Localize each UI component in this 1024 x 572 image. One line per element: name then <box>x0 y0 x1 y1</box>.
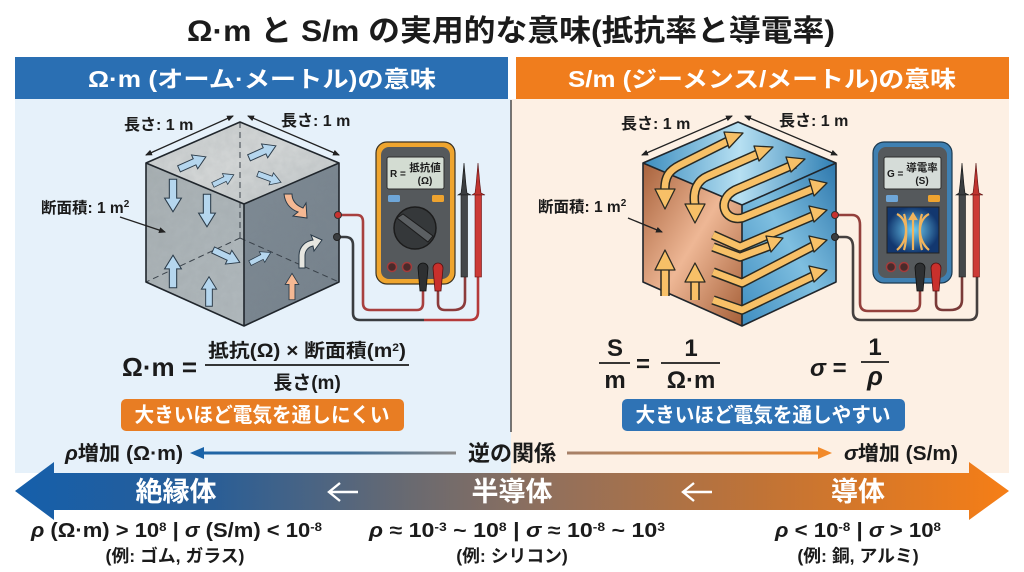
insulator values: -8 <box>310 520 322 534</box>
semiconductor values: -3 <box>434 520 447 534</box>
semiconductor values: 3 <box>657 520 665 534</box>
semiconductor values: | <box>507 520 526 542</box>
cross-section label: 断面積: 1 m <box>41 200 124 217</box>
semiconductor values: ~ 10 <box>605 520 657 542</box>
header: ohm metre: Ω·m (オーム·メートル)の意味 <box>88 66 436 92</box>
formula: siemens per metre: S <box>607 335 623 362</box>
dimension: length labels <box>124 112 350 155</box>
insulator values: σ (S/m) < 10 <box>185 520 300 542</box>
multimeter: resistance <box>376 142 455 291</box>
insulator values: (例: ゴム, ガラス) <box>106 545 245 566</box>
inverse relationship row <box>64 441 958 466</box>
conductor values: σ > 10 <box>869 520 929 542</box>
arrow: left two <box>683 483 712 501</box>
cross-section label <box>41 199 165 232</box>
semiconductor values: ρ ≈ 10 <box>369 520 427 542</box>
cross-section label right: 2 <box>621 198 627 209</box>
semiconductor values: -8 <box>593 520 605 534</box>
meter display: current flow <box>887 207 939 253</box>
multimeter: conductance: 導電率 <box>906 161 938 174</box>
label: conductor: 導体 <box>831 477 885 507</box>
spectrum bar <box>15 462 1009 520</box>
semiconductor values: 8 <box>499 520 507 534</box>
conductor values: 8 <box>934 520 941 534</box>
conductor values: | <box>850 520 869 542</box>
cube: resistive material <box>146 122 339 326</box>
label: sigma increase: σ増加 (S/m) <box>844 442 958 465</box>
dimension: length labels right: 長さ: 1 m <box>779 112 848 130</box>
semiconductor values <box>368 520 665 566</box>
wires: left meter <box>334 212 478 320</box>
panel: ohm metre <box>15 57 511 473</box>
formula: conductivity: 1 <box>868 334 882 361</box>
multimeter: resistance: (Ω) <box>418 176 432 187</box>
formula: siemens per metre: Ω·m <box>667 367 715 394</box>
title: Ω·m と S/m の実用的な意味(抵抗率と導電率) <box>187 15 835 48</box>
formula: conductivity: ρ <box>866 361 883 391</box>
formula: conductivity <box>810 334 889 391</box>
semiconductor values: (例: シリコン) <box>456 546 568 566</box>
formula: conductivity: σ = <box>810 355 847 382</box>
conductor values: ρ < 10 <box>775 520 833 542</box>
arrow: towards conductivity <box>567 447 832 459</box>
formula: siemens per metre: 1 <box>684 335 698 362</box>
label: insulator: 絶縁体 <box>136 477 216 507</box>
callout: harder to conduct <box>121 399 404 431</box>
formula: ohm metre: ) <box>399 341 406 362</box>
conductor values: (例: 銅, アルミ) <box>797 546 919 566</box>
insulator values: ρ (Ω·m) > 10 <box>31 520 149 542</box>
insulator values: | <box>167 520 185 542</box>
callout: easier to conduct <box>622 399 905 431</box>
cross-section label: 2 <box>124 199 130 210</box>
multimeter: conductance: G = <box>887 169 904 180</box>
formula: ohm metre: 2 <box>392 342 399 354</box>
formula: siemens per metre: = <box>636 351 650 378</box>
current arrows: sparse <box>165 139 322 306</box>
test probes: left <box>458 163 485 277</box>
formula: siemens per metre <box>599 335 720 394</box>
multimeter: conductance: (S) <box>915 176 929 187</box>
conductor values: -8 <box>838 520 851 534</box>
formula: ohm metre <box>122 340 409 394</box>
callout: easier to conduct: 大きいほど電気を通しやすい <box>636 404 890 427</box>
test probes: right <box>956 163 983 277</box>
label: rho increase: ρ増加 (Ω·m) <box>64 442 183 465</box>
formula: ohm metre: 抵抗(Ω) × 断面積(m <box>208 341 376 362</box>
multimeter: conductance <box>873 142 952 291</box>
header: siemens per metre: S/m (ジーメンス/メートル)の意味 <box>568 66 956 92</box>
cross-section label right: 断面積: 1 m <box>538 199 621 216</box>
label: inverse relationship: 逆の関係 <box>468 441 556 466</box>
cube: conductive material <box>643 122 836 326</box>
formula: ohm metre: Ω·m = <box>122 352 197 382</box>
dimension: length labels right: 長さ: 1 m <box>621 115 690 133</box>
panel: siemens per metre <box>511 57 1009 473</box>
current arrows: dense <box>655 132 827 310</box>
dimension: length labels: 長さ: 1 m <box>124 116 193 134</box>
dimension: length labels right <box>621 112 848 155</box>
multimeter: resistance: 抵抗値 <box>409 161 441 174</box>
insulator values <box>30 520 322 566</box>
cross-section label right <box>538 198 662 232</box>
callout: harder to conduct: 大きいほど電気を通しにくい <box>134 404 390 427</box>
header: siemens per metre <box>516 57 1009 99</box>
conductor values <box>774 520 941 566</box>
dimension: length labels: 長さ: 1 m <box>281 112 350 130</box>
label: semiconductor: 半導体 <box>472 477 552 507</box>
formula: siemens per metre: m <box>604 367 626 394</box>
formula: ohm metre: 長さ(m) <box>273 372 341 394</box>
semiconductor values: σ ≈ 10 <box>526 520 586 542</box>
arrow: towards resistivity <box>190 447 456 459</box>
insulator values: 8 <box>159 520 167 534</box>
arrow: left one <box>329 483 358 501</box>
header: ohm metre <box>15 57 508 99</box>
multimeter: resistance: R = <box>390 169 406 180</box>
semiconductor values: ~ 10 <box>447 520 499 542</box>
wires: right meter <box>832 212 977 320</box>
